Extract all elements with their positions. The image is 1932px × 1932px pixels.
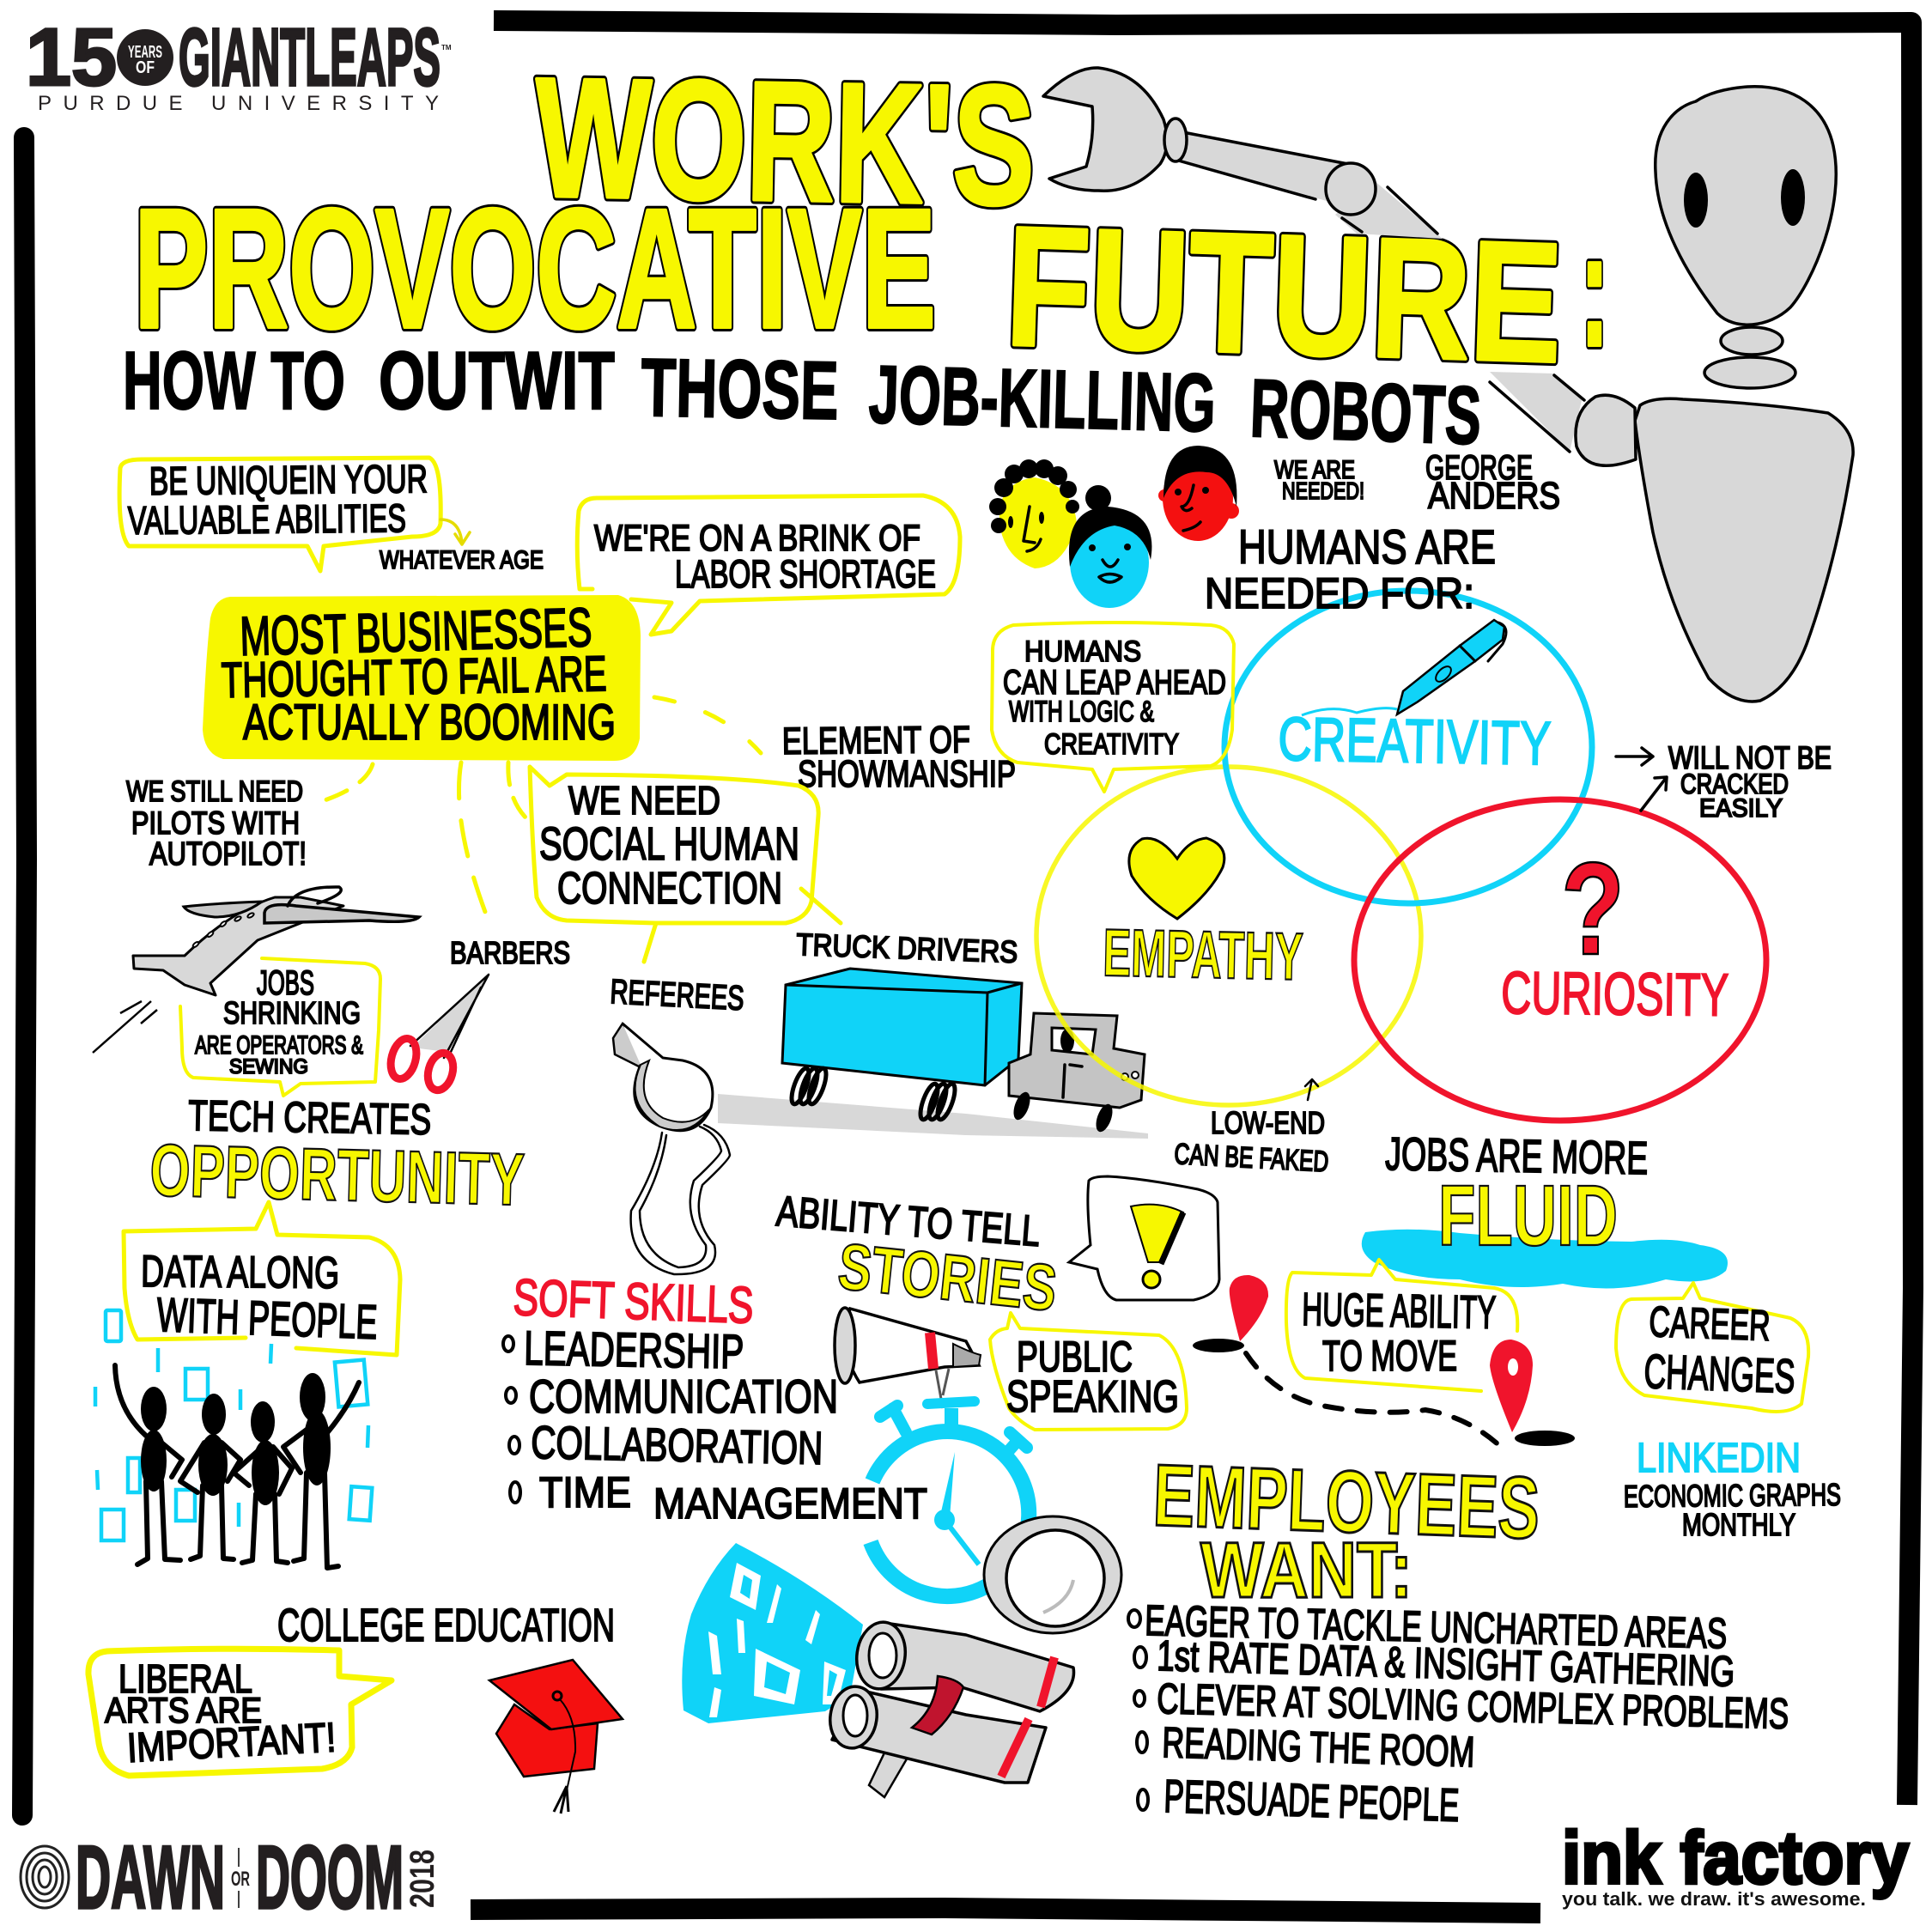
highlight box: most businesses [203, 595, 641, 761]
arrow to low-end [1305, 1079, 1318, 1100]
icon: truck [782, 969, 1145, 1134]
icon: map pin start [1193, 1275, 1268, 1352]
title: work's provocative future: FUTURE [1004, 191, 1564, 398]
logo: dawn or doom 2018: 2018 [404, 1850, 441, 1908]
heading: soft skills: SOFT SKILLS [513, 1268, 755, 1334]
title: work's provocative future: PROVOCATIVE [134, 173, 936, 363]
subtitle: OUTWIT [379, 335, 615, 427]
callout: jobs shrinking: ARE OPERATORS & [195, 1031, 363, 1060]
list: employees want: PERSUADE PEOPLE [1163, 1771, 1460, 1832]
callout: huge ability to move: HUGE ABILITY [1302, 1284, 1497, 1339]
text: george anders [1425, 449, 1560, 517]
title: work's provocative future: : [1580, 198, 1609, 380]
subtitle: JOB-KILLING [867, 349, 1217, 450]
list: soft skills: TIME [539, 1468, 631, 1516]
text: humans are needed for [1205, 519, 1496, 617]
logo: 150 years of giant leaps: PURDUE UNIVERSITY [38, 92, 439, 115]
text: we are needed: WE ARE [1274, 456, 1355, 484]
callout: public speaking: PUBLIC [1017, 1333, 1133, 1381]
callout: career changes: CAREER [1649, 1297, 1771, 1350]
list: employees want: 1st RATE DATA & INSIGHT GATHERING [1157, 1631, 1735, 1696]
text: will not be cracked easily: WILL NOT BE [1668, 740, 1832, 775]
callout: brink of labor shortage [577, 495, 960, 635]
icon: heart [1129, 838, 1224, 919]
callout: data along with people: DATA ALONG [141, 1247, 339, 1298]
text: we are needed: NEEDED! [1282, 477, 1364, 504]
venn circle: creativity [1224, 591, 1592, 903]
callout: be unique: VALUABLE ABILITIES [128, 495, 406, 543]
text: tech creates: TECH CREATES [188, 1091, 432, 1144]
list: employees want: READING THE ROOM [1162, 1718, 1475, 1776]
text: will not be cracked easily [1668, 740, 1832, 823]
text: economic graphs monthly: ECONOMIC GRAPHS [1624, 1477, 1841, 1514]
text: barbers: BARBERS [450, 935, 570, 970]
text: whatever age: WHATEVER AGE [380, 546, 544, 574]
flourish under pen [1302, 708, 1397, 715]
list: soft skills [503, 1321, 927, 1528]
label: opportunity: OPPORTUNITY [149, 1129, 526, 1221]
icon: stopwatch [871, 1401, 1029, 1596]
label: empathy: EMPATHY [1103, 914, 1303, 994]
text: economic graphs monthly: MONTHLY [1682, 1507, 1795, 1542]
title: work's provocative future: PROVOCATIVE [134, 173, 936, 363]
arrow to whatever age [440, 519, 470, 544]
callout: social human connection: WE NEED [568, 778, 720, 823]
text: will not be cracked easily: EASILY [1699, 794, 1783, 823]
icon: binoculars [826, 1619, 1074, 1797]
callout: social human connection [530, 767, 841, 962]
icon: whistle [613, 1024, 730, 1274]
icon: airplane [93, 887, 419, 1053]
logo: 150 years of giant leaps: 15 [26, 12, 117, 103]
list: soft skills: COLLABORATION [531, 1417, 823, 1474]
logo: 150 years of giant leaps: TM [441, 44, 452, 52]
text: college education: COLLEGE EDUCATION [277, 1600, 615, 1651]
text: low-end can be faked: CAN BE FAKED [1174, 1138, 1329, 1178]
heading: employees want: WANT: [1200, 1527, 1413, 1614]
callout: data along with people [124, 1202, 400, 1355]
logo: dawn or doom 2018: OR [231, 1868, 250, 1891]
callout: be unique: BE UNIQUEIN YOUR [149, 456, 428, 503]
logo: dawn or doom 2018: DAWN [76, 1828, 225, 1928]
callout: liberal arts: LIBERAL [118, 1656, 252, 1701]
callout: humans can leap ahead: CREATIVITY [1044, 728, 1179, 761]
callout: jobs shrinking: SHRINKING [223, 995, 361, 1030]
text: low-end can be faked [1174, 1105, 1329, 1178]
icon: speech bubble with exclamation [1069, 1176, 1219, 1300]
icon: pen [1397, 620, 1506, 714]
dashed connectors [314, 697, 761, 923]
callout: liberal arts: IMPORTANT! [126, 1715, 337, 1771]
highlight box: most businesses: MOST BUSINESSES [239, 596, 592, 667]
label: stories: STORIES [835, 1230, 1060, 1326]
icon: scissors [386, 973, 489, 1093]
list: soft skills: COMMUNICATION [529, 1370, 838, 1423]
text: still need pilots: WE STILL NEED [126, 775, 303, 808]
title: work's provocative future: WORK'S [533, 42, 1036, 240]
logo: ink factory: you talk. we draw. it's awesome. [1562, 1888, 1866, 1910]
text: george anders: ANDERS [1428, 475, 1560, 517]
list: soft skills: LEADERSHIP [524, 1321, 744, 1378]
icon: group of people with sticky notes [95, 1310, 372, 1568]
icon: magnifying glass [984, 1516, 1121, 1633]
callout: be unique [119, 456, 440, 571]
dashed route [1246, 1353, 1502, 1448]
text: will not be cracked easily: CRACKED [1680, 769, 1789, 799]
logo: 150 years of giant leaps [26, 12, 452, 115]
puddle [1362, 1230, 1728, 1288]
callout: liberal arts: ARTS ARE [105, 1690, 262, 1730]
icon: graduation cap [489, 1660, 623, 1814]
faces of humans [989, 446, 1239, 608]
text: truck drivers: TRUCK DRIVERS [796, 927, 1018, 969]
callout: brink of labor shortage: WE'RE ON A BRINK OF [594, 518, 920, 559]
text: linkedin: LINKEDIN [1637, 1436, 1801, 1481]
text: we are needed [1274, 456, 1364, 504]
callout: brink of labor shortage: LABOR SHORTAGE [675, 552, 936, 596]
text: humans are needed for: HUMANS ARE [1238, 519, 1496, 574]
text: element of showmanship [782, 719, 1016, 795]
text: still need pilots: PILOTS WITH [131, 805, 300, 841]
heading: employees want [1151, 1446, 1541, 1614]
callout: career changes: CHANGES [1643, 1344, 1796, 1403]
callout: career changes [1616, 1283, 1808, 1412]
venn circle: empathy [1036, 767, 1421, 1105]
callout: public speaking [990, 1313, 1187, 1430]
label: curiosity: CURIOSITY [1501, 959, 1729, 1029]
logo: dawn or doom 2018: DOOM [256, 1828, 404, 1928]
logo: 150 years of giant leaps: OF [136, 58, 155, 77]
robot arm with wrench [1043, 68, 1443, 239]
icon: question mark: ? [1561, 835, 1625, 982]
callout: humans can leap ahead: HUMANS [1024, 635, 1141, 668]
text: element of showmanship: ELEMENT OF [782, 719, 970, 762]
logo: 150 years of giant leaps: GIANTLEAPS [179, 12, 440, 103]
text: still need pilots [126, 775, 307, 872]
callout: huge ability to move: TO MOVE [1322, 1332, 1457, 1380]
callout: jobs shrinking: SEWING [229, 1055, 308, 1078]
highlight box: most businesses: ACTUALLY BOOMING [243, 695, 616, 750]
logo: ink factory: ink factory [1562, 1817, 1909, 1899]
label: creativity: CREATIVITY [1278, 705, 1552, 779]
title: work's provocative future [134, 42, 1609, 398]
callout: jobs shrinking [180, 958, 380, 1096]
text: element of showmanship: SHOWMANSHIP [798, 753, 1016, 795]
text: still need pilots: AUTOPILOT! [149, 836, 307, 872]
highlight box: most businesses: THOUGHT TO FAIL ARE [221, 646, 607, 708]
callout: jobs shrinking: JOBS [257, 964, 314, 1002]
callout: public speaking: SPEAKING [1006, 1372, 1179, 1422]
title: work's provocative future: FUTURE [1004, 191, 1564, 398]
callout: humans can leap ahead: CAN LEAP AHEAD [1003, 664, 1226, 702]
title: work's provocative future: WORK'S [533, 42, 1036, 240]
list: employees want [1128, 1596, 1789, 1832]
robot figure [1490, 87, 1853, 702]
truck shadow [718, 1094, 1148, 1139]
text: jobs are more: JOBS ARE MORE [1385, 1128, 1649, 1184]
subtitle [123, 335, 1483, 462]
callout: humans can leap ahead: WITH LOGIC & [1009, 696, 1154, 728]
text: referees: REFEREES [610, 973, 745, 1018]
text: ability to tell: ABILITY TO TELL [775, 1187, 1042, 1255]
text: humans are needed for: NEEDED FOR: [1205, 569, 1474, 617]
arrows to will not be cracked [1616, 748, 1667, 811]
logo: 150 years of giant leaps: YEARS [128, 43, 162, 62]
icon: cyan building [682, 1543, 863, 1723]
heading: employees want: EMPLOYEES [1151, 1446, 1541, 1558]
text: economic graphs monthly [1624, 1477, 1841, 1542]
callout: social human connection: CONNECTION [557, 864, 782, 914]
callout: liberal arts [88, 1649, 392, 1776]
callout: social human connection: SOCIAL HUMAN [539, 818, 799, 870]
icon: megaphone [835, 1308, 981, 1408]
list: soft skills: MANAGEMENT [653, 1479, 927, 1528]
label: fluid: FLUID [1438, 1168, 1618, 1264]
logo: dawn or doom 2018 [21, 1828, 441, 1928]
icon: map pin end [1490, 1340, 1575, 1446]
callout: data along with people: WITH PEOPLE [156, 1287, 379, 1349]
venn circle: curiosity [1354, 799, 1766, 1121]
title: work's provocative future: : [1580, 198, 1609, 380]
callout: humans can leap ahead [992, 623, 1234, 792]
subtitle: HOW TO [123, 335, 345, 427]
text: george anders: GEORGE [1425, 449, 1533, 487]
subtitle: THOSE [641, 342, 839, 437]
text: low-end can be faked: LOW-END [1211, 1105, 1325, 1140]
callout: huge ability to move [1286, 1260, 1517, 1391]
subtitle: ROBOTS [1249, 362, 1483, 462]
